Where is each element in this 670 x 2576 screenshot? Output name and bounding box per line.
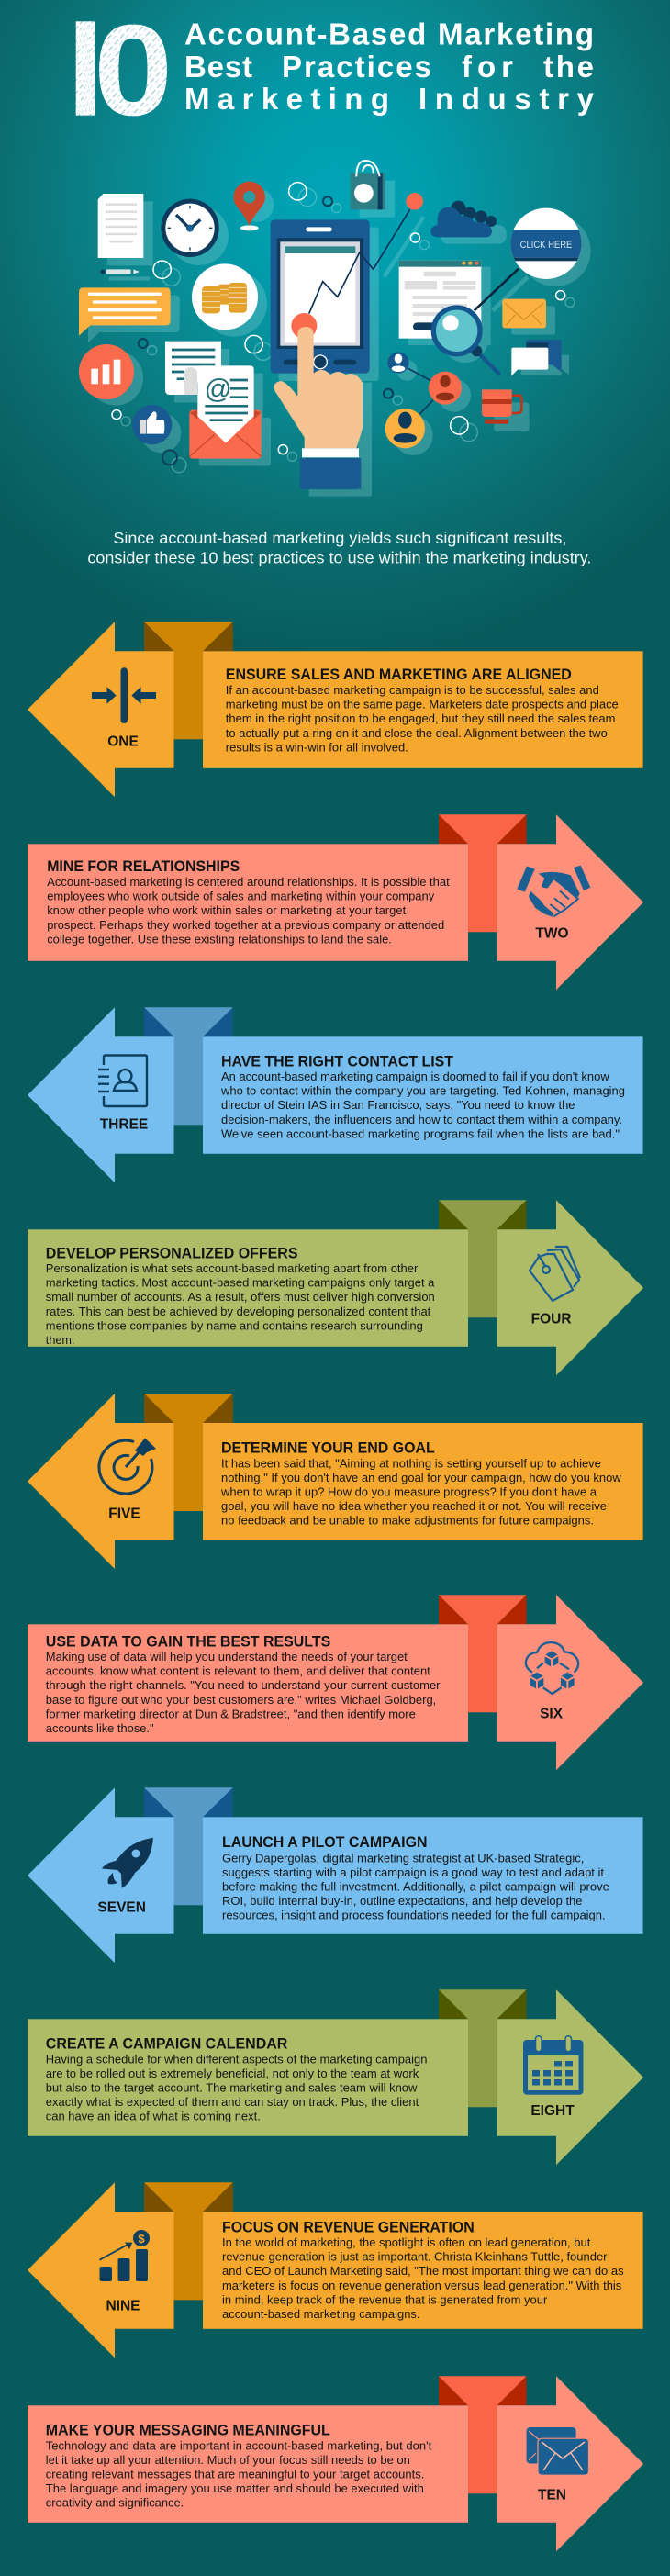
body text: rates. This can best be achieved by developing personalized content that: [46, 1305, 431, 1318]
title lines: for: [462, 50, 513, 84]
icon: email envelope: @: [205, 375, 232, 405]
body text: former marketing director at Dun & Bradstreet, "and then identify more: [46, 1707, 416, 1720]
arrow banner: [28, 1787, 643, 1963]
body text: marketing must be on the same page. Marketers date prospects and place: [226, 698, 619, 711]
icon: target with arrow: [99, 1438, 156, 1494]
icon: clock: [161, 199, 219, 257]
icon: price tags: [530, 1247, 580, 1301]
body text: Gerry Dapergolas, digital marketing strategist at UK-based Strategic,: [222, 1851, 584, 1865]
body text: in mind, keep track of the revenue that is generated from your: [222, 2292, 548, 2306]
body text: and CEO of Launch Marketing said, "The most important thing we can do as: [222, 2264, 624, 2278]
title lines: Best: [184, 50, 252, 84]
rings: [112, 183, 565, 454]
body text: accounts like those.": [46, 1721, 154, 1735]
body text: small number of accounts. As a result, offers must deliver high conversion: [46, 1290, 435, 1304]
body text: Account-based marketing is centered around relationships. It is possible that: [47, 875, 450, 889]
panel: four: [28, 1200, 643, 1375]
body text: ROI, build internal buy-in, outline expectations, and help develop the: [222, 1894, 582, 1908]
body text: prospect. Perhaps they worked together at a previous company or attended: [47, 918, 444, 932]
intro text: Since account-based marketing yields such significant results,: [113, 529, 566, 547]
hero illustration: [79, 161, 591, 497]
icon: revenue chart: $: [138, 2232, 145, 2246]
heading: DEVELOP PERSONALIZED OFFERS: [46, 1246, 298, 1262]
body text: An account-based marketing campaign is doomed to fail if you don't know: [221, 1070, 609, 1083]
chart line: [309, 193, 423, 314]
body text: employees who work outside of sales and marketing within your company: [47, 890, 435, 903]
body text: creating relevant messages that are meaningful to your target accounts.: [46, 2468, 424, 2481]
body text: The language and imagery you use matter and should be executed with: [46, 2481, 424, 2495]
icon: aligned arrows: [92, 667, 156, 723]
body text: but also to the target account. The marketing and sales team will know: [46, 2080, 418, 2095]
body text: no feedback and be unable to make adjustments for future campaigns.: [221, 1514, 594, 1528]
panel: ten: [28, 2376, 643, 2551]
icon: email envelope: [189, 365, 262, 459]
icon: magnifying glass: [433, 308, 498, 374]
label: FOUR: [531, 1312, 572, 1327]
shadows: [88, 181, 591, 497]
icon: handshake: [517, 866, 590, 917]
icon: contact book: [98, 1056, 147, 1106]
body text: before making the full investment. Additionally, a pilot campaign will prove: [222, 1880, 609, 1893]
title lines: the: [543, 50, 594, 84]
icon: rocket: [102, 1838, 153, 1888]
icon: shopping bag: [351, 161, 385, 209]
heading: DETERMINE YOUR END GOAL: [221, 1439, 435, 1456]
label: SEVEN: [97, 1900, 146, 1916]
body text: accounts, know what content is relevant to them, and deliver that content: [46, 1664, 430, 1678]
icon: mug: [482, 389, 521, 424]
heading: ENSURE SALES AND MARKETING ARE ALIGNED: [226, 666, 572, 683]
body text: through the right channels. "You need to understand your current customer: [46, 1678, 441, 1692]
panel: nine: [28, 2182, 643, 2358]
body text: results is a win-win for all involved.: [226, 740, 408, 754]
body text: college together. Use these existing relationships to land the sale.: [47, 932, 392, 946]
icon: location pin: [233, 182, 265, 230]
arrow banner: [28, 814, 643, 990]
body text: [220, 1456, 621, 1528]
icon: thumbs up: [132, 405, 172, 444]
icon: revenue chart: [99, 2230, 150, 2281]
icon: pointing hand: [274, 313, 363, 489]
body text: [222, 1851, 609, 1922]
icon: orange envelope: [502, 299, 546, 328]
title lines: Industry: [419, 82, 595, 116]
body text: creativity and significance.: [46, 2496, 184, 2510]
body text: mentions those companies by name and contains research surrounding: [46, 1318, 423, 1332]
icon: speech bubble: [79, 287, 171, 336]
icon: paper scroll: [165, 342, 221, 395]
big number 10: 1: [73, 0, 96, 142]
body text: know other people who work within sales or marketing at your target: [47, 903, 406, 917]
body text: [46, 1650, 441, 1735]
body text: base to figure out who your best customers are," writes Michael Goldberg,: [46, 1693, 436, 1707]
body text: to actually put a ring on it and close the deal. Alignment between the two: [226, 726, 608, 740]
body text: In the world of marketing, the spotlight is often on lead generation, but: [222, 2235, 591, 2249]
icon: pen: [100, 269, 140, 274]
heading: MINE FOR RELATIONSHIPS: [47, 858, 240, 875]
ghost rings: [121, 188, 575, 473]
body text: marketing tactics. Most account-based marketing campaigns only target a: [46, 1276, 435, 1290]
arrow banner: [28, 1394, 643, 1569]
body text: them.: [46, 1333, 75, 1347]
body text: can have an idea of what is coming next.: [46, 2110, 261, 2123]
body text: Technology and data are important in account-based marketing, but don't: [46, 2438, 431, 2452]
heading: MAKE YOUR MESSAGING MEANINGFUL: [46, 2422, 330, 2438]
icon: phone: [271, 219, 370, 374]
heading: FOCUS ON REVENUE GENERATION: [222, 2219, 475, 2235]
heading: USE DATA TO GAIN THE BEST RESULTS: [46, 1633, 330, 1650]
arrow banner: [28, 1007, 643, 1182]
body text: marketers is focus on revenue generation versus lead generation." With this: [222, 2279, 622, 2292]
panel: one: [28, 622, 643, 797]
icon: people network: [385, 352, 462, 448]
body text: resources, insight and process foundations needed for the full campaign.: [222, 1909, 606, 1922]
body text: [46, 2438, 431, 2510]
panel: two: [28, 814, 643, 990]
label: NINE: [106, 2299, 140, 2314]
big number 10: 0: [94, 0, 173, 142]
panel: eight: [28, 1989, 643, 2165]
body text: [222, 2235, 624, 2321]
body text: [220, 1070, 625, 1140]
arrow banner: [28, 1595, 643, 1770]
body text: are to be rolled out is extremely beneficial, not only to the team at work: [46, 2066, 419, 2080]
icon: click here button: CLICK HERE: [520, 240, 572, 251]
body text: [226, 683, 619, 754]
body text: It has been said that, "Aiming at nothing is setting yourself up to achieve: [221, 1456, 601, 1470]
body text: If an account-based marketing campaign is to be successful, sales and: [226, 683, 599, 697]
label: ONE: [107, 734, 139, 750]
title lines: [184, 17, 595, 116]
body text: decision-makers, the influencers and how to contact them within a company.: [221, 1113, 622, 1126]
body text: who to contact within the company you are targeting. Ted Kohnen, managing: [220, 1084, 625, 1098]
body text: [46, 1261, 435, 1347]
body text: nothing." If you don't have an end goal for your campaign, how do you know: [221, 1471, 621, 1484]
label: SIX: [540, 1707, 564, 1722]
big number 10: [0, 0, 173, 142]
icon: calendar: [523, 2036, 584, 2095]
icon: coins: [192, 263, 258, 330]
arrow banner: [28, 1989, 643, 2165]
body text: Making use of data will help you understand the needs of your target: [46, 1650, 408, 1663]
title lines: Practices: [282, 50, 431, 84]
body text: exactly what is expected of them and can stay on track. Plus, the client: [46, 2095, 419, 2109]
body text: when to wrap it up? How do you measure progress? If you don't have a: [220, 1485, 597, 1498]
icon: bar chart circle: [79, 344, 134, 399]
icon: document: [98, 194, 143, 258]
title lines: Marketing: [184, 82, 389, 116]
body text: suggests starting with a pilot campaign is a good way to test and adapt it: [222, 1865, 604, 1879]
body text: revenue generation is just as important. Christa Kleinhans Tuttle, founder: [222, 2250, 608, 2264]
body text: [46, 2052, 428, 2123]
label: FIVE: [108, 1506, 140, 1522]
body text: account-based marketing campaigns.: [222, 2307, 420, 2321]
arrow banner: [28, 1200, 643, 1375]
icon: browser window: [399, 261, 481, 339]
heading: LAUNCH A PILOT CAMPAIGN: [222, 1834, 428, 1851]
icon: cloud: [430, 201, 497, 237]
panel: seven: [28, 1787, 643, 1963]
icon: chat bubbles: [511, 340, 562, 375]
label: THREE: [100, 1117, 148, 1133]
intro text: [87, 529, 591, 567]
panel: three: [28, 1007, 643, 1182]
body text: [47, 875, 450, 946]
title lines: Account-Based Marketing: [184, 17, 594, 51]
body text: Having a schedule for when different aspects of the marketing campaign: [46, 2052, 428, 2066]
label: TEN: [538, 2488, 566, 2503]
body text: We've seen account-based marketing programs fail when the lists are bad.": [221, 1126, 620, 1140]
body text: let it take up all your attention. Much of your focus still needs to be on: [46, 2453, 410, 2467]
icon: cloud network: [526, 1642, 578, 1694]
intro text: consider these 10 best practices to use within the marketing industry.: [87, 549, 591, 567]
panel: five: [28, 1394, 643, 1569]
label: EIGHT: [530, 2103, 575, 2119]
heading: CREATE A CAMPAIGN CALENDAR: [46, 2035, 288, 2052]
body text: director of Stein IAS in San Francisco, says, "You need to know the: [221, 1098, 575, 1112]
icon: click here button: [475, 208, 583, 310]
icon: envelopes: [527, 2427, 589, 2475]
right half of illustration: [351, 161, 583, 448]
arrow banner: [28, 622, 643, 797]
body text: Personalization is what sets account-based marketing apart from other: [46, 1261, 419, 1275]
panel: six: [28, 1595, 643, 1770]
arrow banner: [28, 2182, 643, 2358]
title: [0, 0, 595, 142]
arrow banner: [28, 2376, 643, 2551]
body text: them in the right position to be engaged, but they still need the sales team: [226, 711, 615, 725]
heading: HAVE THE RIGHT CONTACT LIST: [221, 1053, 453, 1070]
label: TWO: [535, 926, 569, 942]
body text: goal, you will have no idea whether you reached it or not. You will receive: [221, 1499, 607, 1513]
